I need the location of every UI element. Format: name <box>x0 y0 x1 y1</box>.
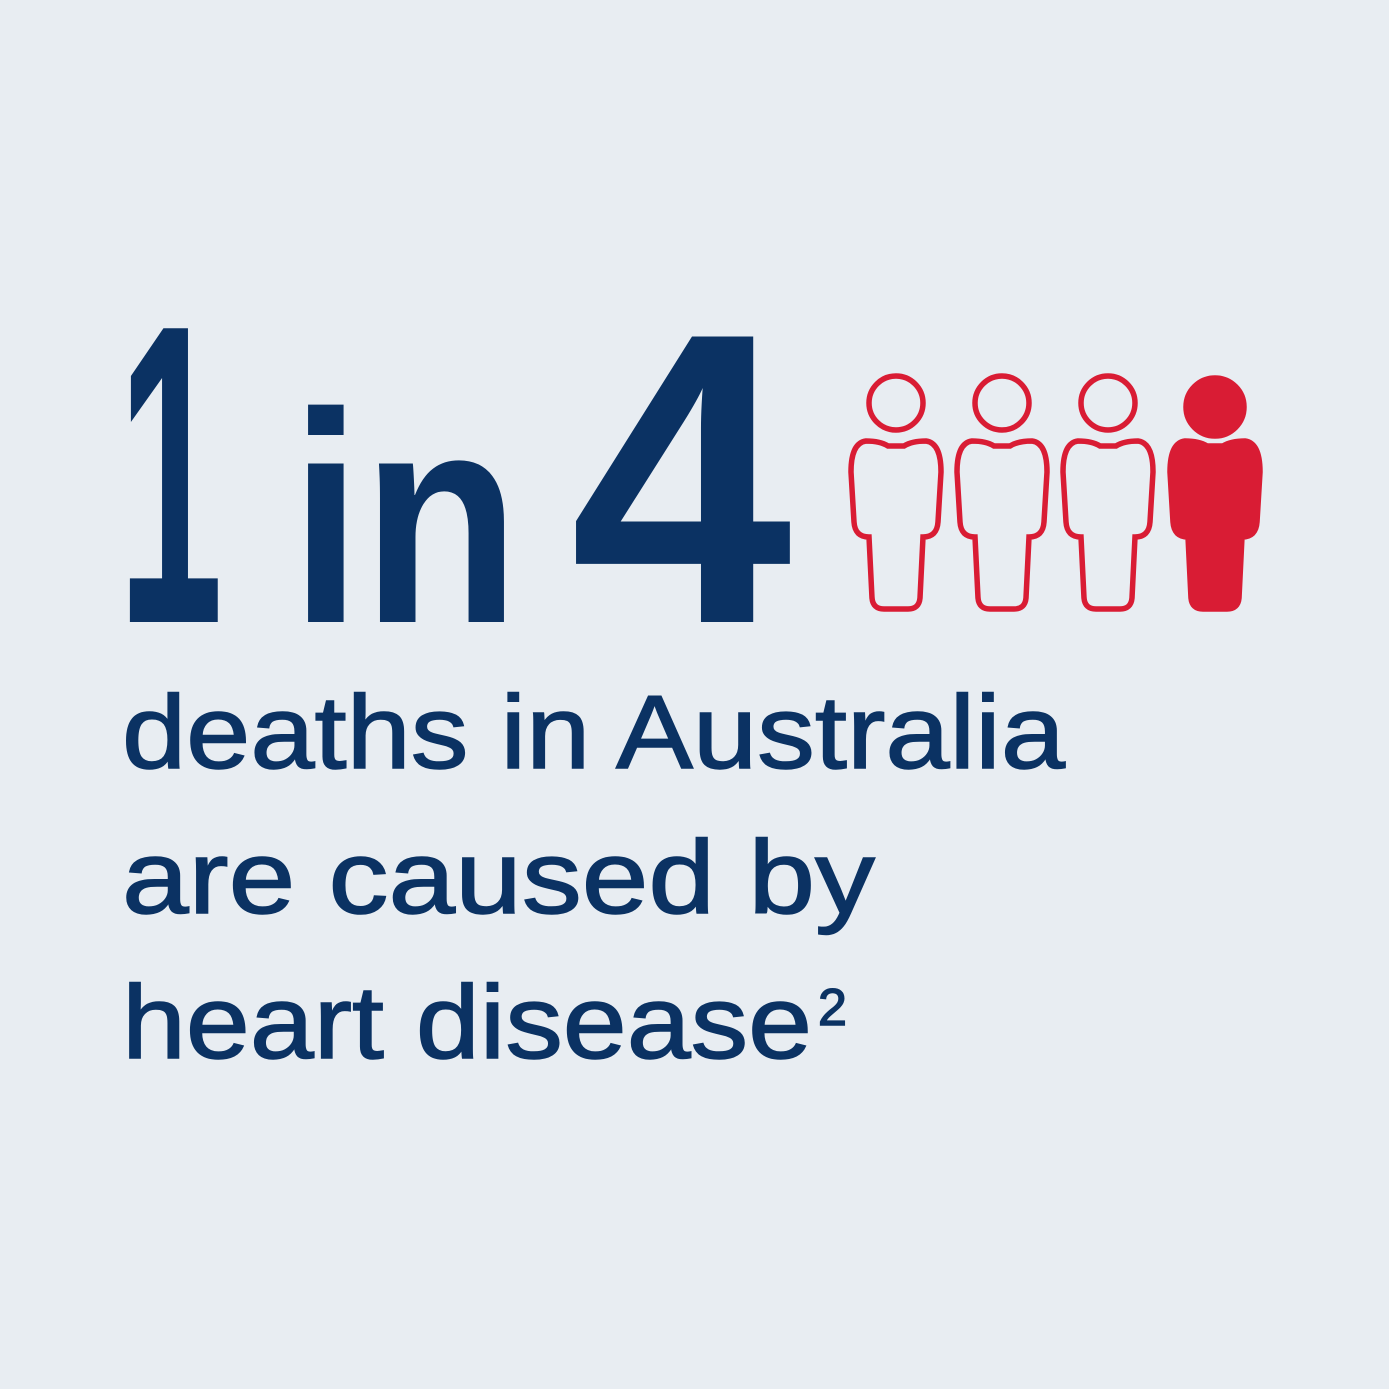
headline: 1 in 4: in <box>290 350 520 686</box>
person outline 1 <box>851 376 941 609</box>
person outline 2 <box>957 376 1047 609</box>
icon: people (1 of 4 highlighted) <box>851 376 1260 609</box>
person filled <box>1170 378 1260 609</box>
headline: 1 in 4 <box>118 236 795 713</box>
caption text: deaths in Australia <box>122 675 1065 791</box>
person outline 3 <box>1063 376 1153 609</box>
caption text: are caused by <box>122 820 875 936</box>
headline: 1 in 4: 1 <box>118 236 223 713</box>
caption text: 2 <box>818 979 847 1037</box>
headline: 1 in 4: 4 <box>570 246 795 710</box>
caption text <box>122 675 1065 1081</box>
caption text: heart disease <box>122 965 812 1081</box>
